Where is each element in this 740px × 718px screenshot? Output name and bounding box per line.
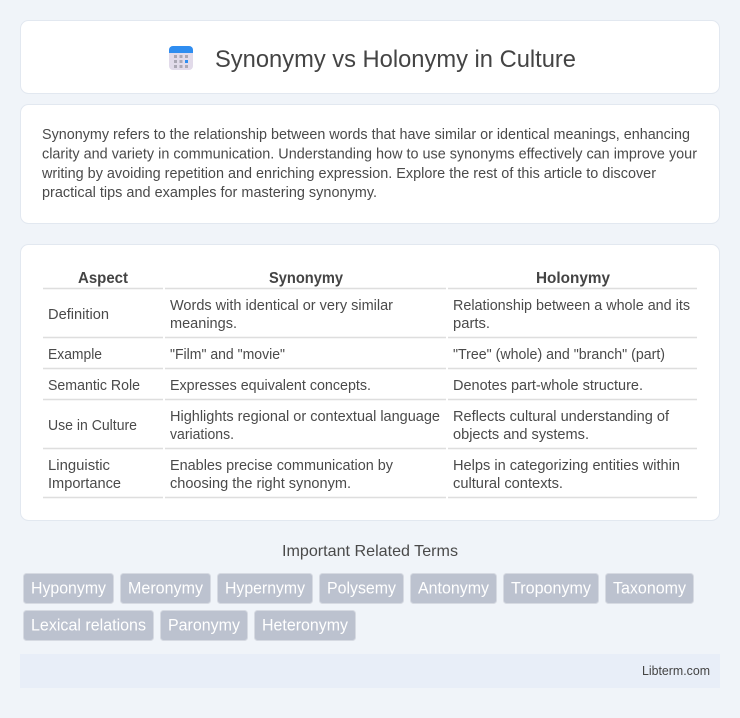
heading: important related terms: Important Related Terms <box>282 543 458 560</box>
tag: Hypernymy: Hypernymy <box>225 580 306 598</box>
table row: semantic role <box>43 378 697 400</box>
table header: Holonymy <box>536 270 610 287</box>
table header: Synonymy <box>269 270 343 287</box>
tag: Taxonomy: Taxonomy <box>613 580 687 598</box>
table row: linguistic importance: Enables precise communication by <box>170 458 394 474</box>
text block: introduction paragraph: clarity and variety in communication. Understanding how to use synonyms effectively can improve your <box>42 146 697 162</box>
table row: use in culture: variations. <box>170 427 234 443</box>
table row: linguistic importance: Helps in categorizing entities within <box>453 458 680 474</box>
tag: Lexical relations <box>24 610 154 640</box>
table row: definition: Definition <box>48 307 109 323</box>
tag: Paronymy: Paronymy <box>168 616 241 634</box>
title: Synonymy vs Holonymy in Culture <box>215 46 576 73</box>
table row: semantic role: Semantic Role <box>48 378 140 394</box>
related term tags <box>24 574 694 640</box>
table row: linguistic importance: Linguistic <box>48 458 110 474</box>
tag: Polysemy <box>320 574 404 604</box>
tag: Troponymy: Troponymy <box>511 580 592 598</box>
table row: definition: parts. <box>453 316 490 332</box>
table row: linguistic importance: Importance <box>48 476 121 492</box>
tag: Troponymy <box>504 574 598 604</box>
table row: use in culture: Highlights regional or contextual language <box>170 409 440 425</box>
table row: semantic role: Expresses equivalent concepts. <box>170 378 371 394</box>
table row: example <box>43 347 697 368</box>
table row: example: "Tree" (whole) and "branch" (part) <box>453 347 665 363</box>
text block: introduction paragraph: writing by avoiding repetition and enriching expression. Explore the rest of this article to discover <box>41 165 656 182</box>
table row: semantic role: Denotes part-whole structure. <box>453 378 643 394</box>
panel: title header <box>20 20 720 94</box>
tag: Antonymy: Antonymy <box>418 580 490 598</box>
tag: Taxonomy <box>606 574 694 604</box>
table row: use in culture <box>43 409 697 448</box>
footer <box>20 654 720 688</box>
tag: Hyponymy <box>24 574 114 604</box>
table row: linguistic importance: cultural contexts. <box>453 476 563 492</box>
table row: linguistic importance <box>43 458 697 498</box>
table row: definition: meanings. <box>170 316 237 332</box>
table header: Aspect <box>78 270 129 287</box>
tag: Meronymy: Meronymy <box>128 580 204 598</box>
tag: Heteronymy <box>254 610 356 640</box>
table row: example: Example <box>48 347 102 363</box>
tag: Heteronymy: Heteronymy <box>262 616 349 634</box>
table row: definition: Words with identical or very similar <box>170 298 393 314</box>
table row: definition: Relationship between a whole and its <box>453 298 690 314</box>
table row: linguistic importance: choosing the right synonym. <box>170 476 351 492</box>
tag: Lexical relations: Lexical relations <box>31 616 146 634</box>
tag: Polysemy: Polysemy <box>327 580 397 598</box>
table row: use in culture: objects and systems. <box>453 427 589 443</box>
tag: Antonymy <box>410 574 496 604</box>
table row: use in culture: Reflects cultural understanding of <box>453 409 670 425</box>
text block: introduction paragraph <box>41 126 697 201</box>
table header <box>43 270 697 288</box>
tag: Meronymy <box>120 574 210 604</box>
text block: introduction paragraph: practical tips and examples for mastering synonymy. <box>42 184 377 201</box>
footer credit: Libterm.com <box>642 664 710 678</box>
tag: Paronymy <box>160 610 248 640</box>
table row: example: "Film" and "movie" <box>170 347 285 363</box>
panel: introduction <box>20 104 720 224</box>
table row: use in culture: Use in Culture <box>48 418 137 434</box>
tag: Hypernymy <box>218 574 312 604</box>
icon: calendar <box>169 46 193 70</box>
table row: definition <box>43 298 697 338</box>
panel: comparison table <box>20 244 720 520</box>
text block: introduction paragraph: Synonymy refers to the relationship between words that have similar or identical meanings, enhancing <box>42 126 690 143</box>
tag: Hyponymy: Hyponymy <box>31 580 107 598</box>
